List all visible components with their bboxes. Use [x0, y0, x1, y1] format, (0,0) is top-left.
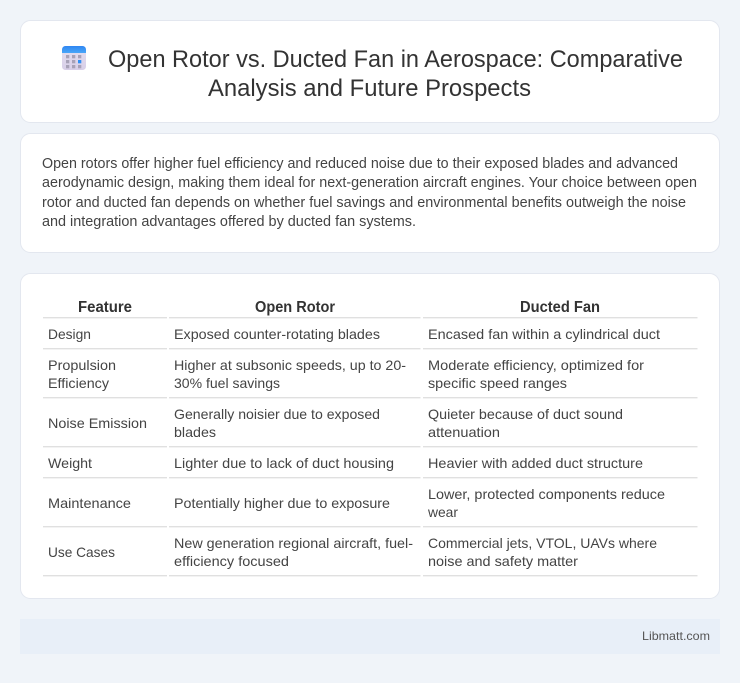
title: Open Rotor vs. Ducted Fan in Aerospace: Comparative [108, 46, 683, 73]
table row: weight: Lighter due to lack of duct housing [174, 455, 394, 471]
table row: noise emission: Noise Emission [48, 415, 147, 431]
table row: use cases: noise and safety matter [428, 553, 578, 569]
table row: propulsion efficiency: Efficiency [48, 375, 109, 391]
table row: noise emission: attenuation [428, 424, 500, 440]
text block: introduction: Open rotors offer higher fuel efficiency and reduced noise due to their exposed blades and advanced [42, 156, 678, 172]
table row: maintenance: wear [427, 504, 458, 520]
table row: maintenance: Maintenance [48, 495, 131, 511]
table row: use cases: Use Cases [48, 544, 115, 560]
table row: propulsion efficiency: specific speed ranges [428, 375, 567, 391]
title [108, 46, 683, 102]
table row: weight: Weight [48, 455, 92, 471]
table header: Open Rotor [255, 299, 335, 316]
table row: design: Encased fan within a cylindrical duct [428, 326, 660, 342]
table header: Feature [78, 299, 132, 316]
table row: propulsion efficiency: Higher at subsonic speeds, up to 20- [174, 357, 406, 373]
table row: noise emission [48, 406, 623, 440]
icon: calendar [62, 46, 86, 70]
table row: design: Design [48, 326, 91, 342]
table row: propulsion efficiency: Moderate efficiency, optimized for [428, 357, 644, 373]
footer text: Libmatt.com [642, 629, 710, 643]
table row: noise emission: Generally noisier due to exposed [174, 406, 380, 422]
text block: introduction [42, 156, 697, 230]
text block: introduction: rotor and ducted fan depends on whether fuel savings and environmental benefits outweigh the noise [42, 195, 686, 211]
panel: introduction [20, 134, 720, 252]
text block: introduction: aerodynamic design, making them ideal for next-generation aircraft engines. Your choice between open [42, 175, 697, 191]
panel: header [20, 20, 720, 122]
table row: use cases: efficiency focused [174, 553, 289, 569]
table row: use cases: New generation regional aircraft, fuel- [174, 535, 413, 551]
table row: maintenance: Lower, protected components reduce [428, 486, 665, 502]
table row: propulsion efficiency: 30% fuel savings [174, 375, 280, 391]
table row: use cases: Commercial jets, VTOL, UAVs where [428, 535, 657, 551]
table row: use cases [48, 535, 657, 569]
table header [78, 299, 600, 316]
table row: design: Exposed counter-rotating blades [174, 326, 380, 342]
table header: Ducted Fan [520, 299, 600, 316]
panel: comparison table [20, 274, 720, 598]
table row: noise emission: Quieter because of duct sound [428, 406, 623, 422]
footer [20, 619, 720, 654]
table row: weight [48, 455, 643, 471]
table row: design [48, 326, 660, 342]
table row: propulsion efficiency [48, 357, 644, 391]
title: Analysis and Future Prospects [208, 75, 531, 102]
table row: noise emission: blades [174, 424, 216, 440]
table row: propulsion efficiency: Propulsion [48, 357, 116, 373]
text block: introduction: and integration advantages offered by ducted fan systems. [42, 214, 416, 230]
table row: weight: Heavier with added duct structure [428, 455, 643, 471]
table row: maintenance: Potentially higher due to exposure [174, 495, 390, 511]
table row: maintenance [48, 486, 665, 520]
